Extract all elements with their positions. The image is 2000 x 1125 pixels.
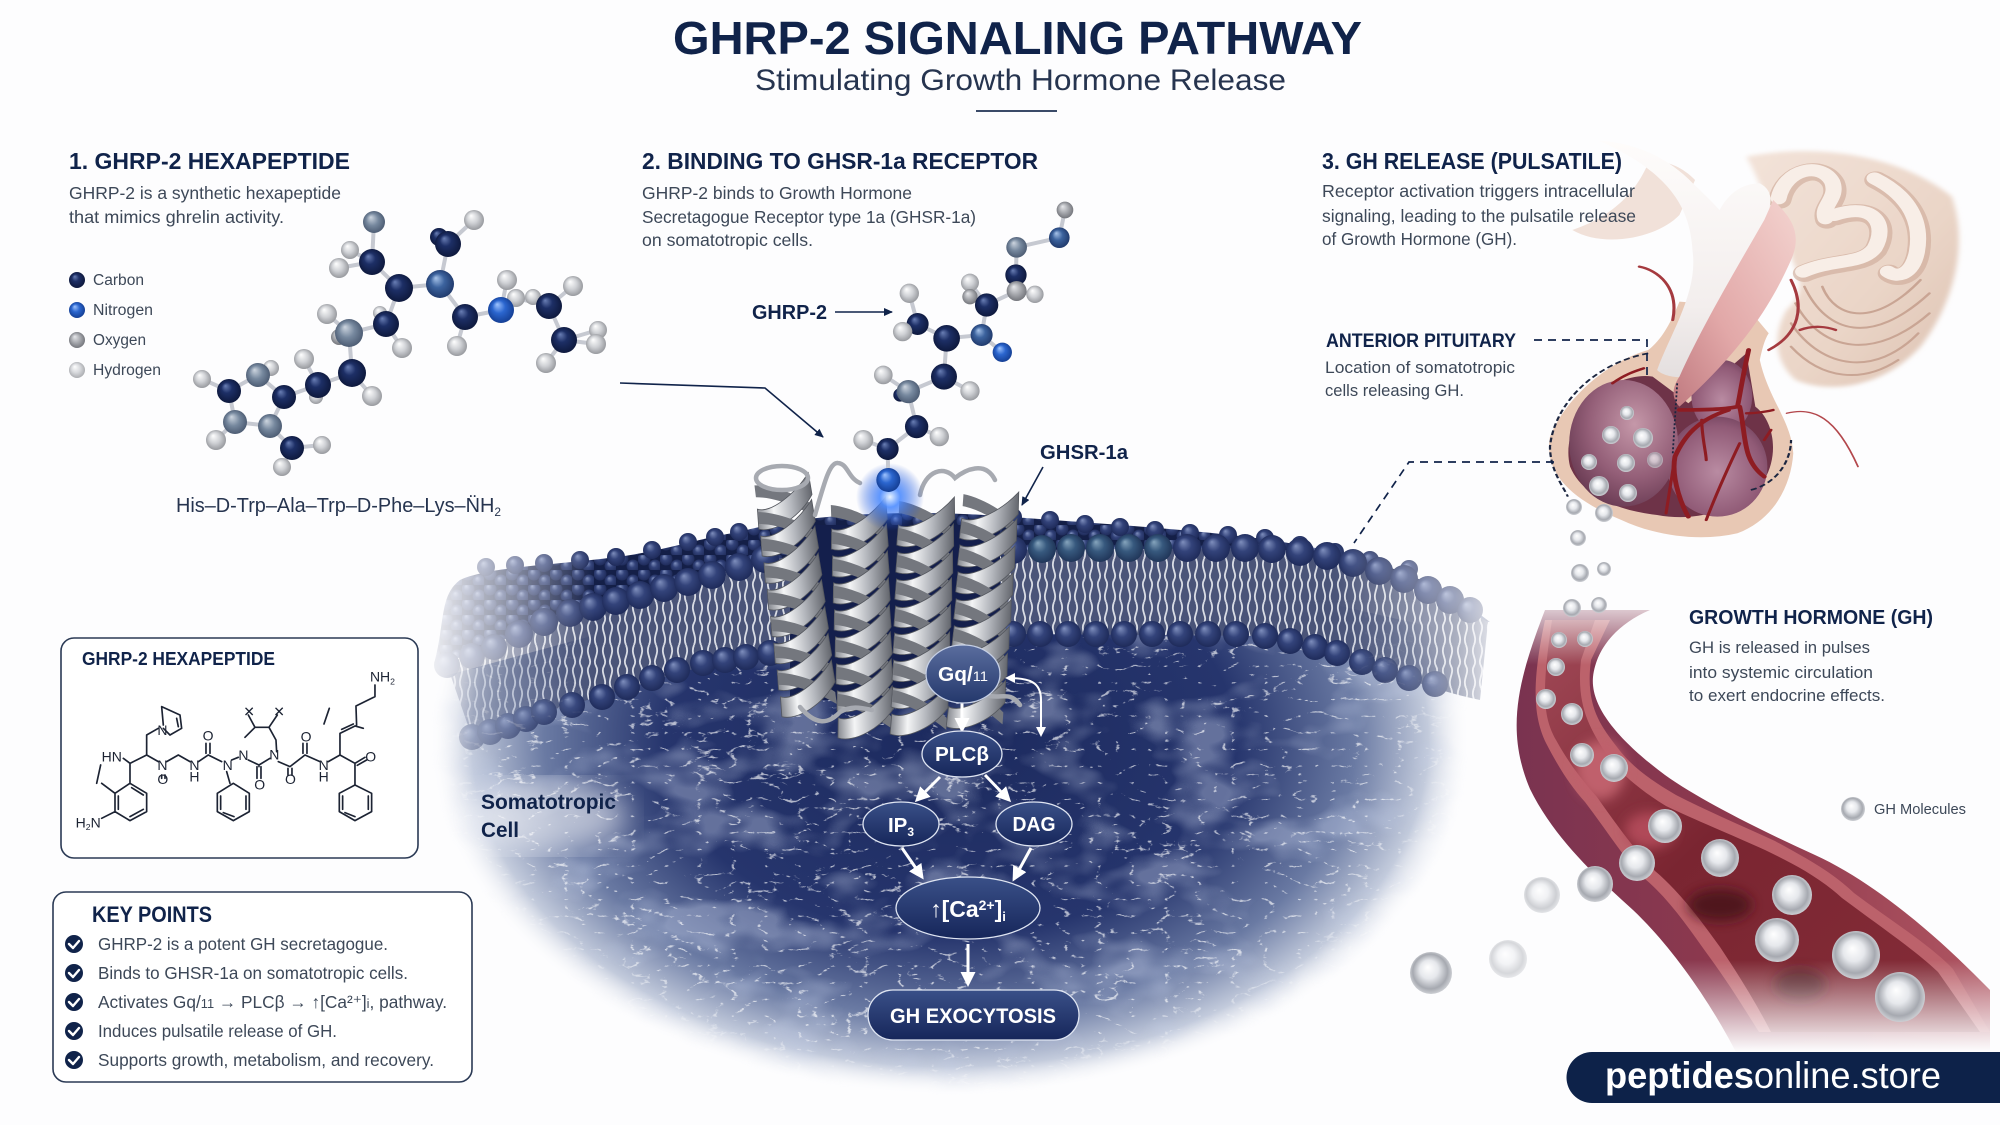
arrow: GHRP-2 label to molecule — [835, 311, 892, 313]
skeletal formula: O — [254, 776, 265, 792]
node: DAG: DAG — [1012, 813, 1056, 836]
node: DAG — [996, 802, 1072, 846]
GH molecules legend — [1841, 797, 1966, 821]
section 2 text: on somatotropic cells. — [642, 230, 813, 250]
atom legend: Nitrogen — [93, 302, 153, 319]
dashed connector: cell to pituitary — [1354, 462, 1554, 543]
section 3 text: 3. GH RELEASE (PULSATILE) — [1322, 148, 1622, 174]
GHSR-1a receptor helices — [753, 463, 1020, 739]
upper lipid heads — [434, 534, 1483, 678]
section 3 text — [1322, 148, 1636, 249]
skeletal formula: NH — [370, 669, 390, 685]
section 2 text: Secretagogue Receptor type 1a (GHSR-1a) — [642, 207, 976, 227]
skeletal formula — [76, 669, 395, 832]
node: calcium: ↑[Ca — [930, 896, 979, 922]
skeletal formula: H — [319, 768, 329, 784]
key points list: Activates Gq/11 → PLCβ → ↑[Ca²⁺]i, pathway. — [98, 992, 447, 1012]
brand bar: peptidesonline.store — [1605, 1055, 1941, 1096]
section 3 text: Receptor activation triggers intracellular — [1322, 181, 1635, 201]
anterior pituitary label: ANTERIOR PITUITARY — [1326, 330, 1516, 352]
label: GHSR-1a: GHSR-1a — [1040, 441, 1129, 464]
pituitary cavity — [1568, 353, 1773, 517]
GH molecules legend: GH Molecules — [1874, 801, 1966, 818]
section 2 text — [642, 148, 1038, 250]
section 1 text: 1. GHRP-2 HEXAPEPTIDE — [69, 148, 350, 174]
secretory beads in pituitary — [1566, 406, 1663, 582]
node: IP3 — [863, 802, 939, 846]
receptor loops — [756, 463, 1020, 721]
pituitary stalk — [1674, 200, 1796, 407]
node: calcium: 2+ — [979, 897, 995, 913]
skeletal formula: H — [189, 768, 199, 784]
title: GHRP-2 SIGNALING PATHWAY — [673, 12, 1362, 64]
node: calcium — [896, 877, 1040, 939]
cell body — [444, 610, 1456, 1088]
node: PLCβ — [922, 731, 1002, 777]
atom legend: Oxygen — [93, 332, 146, 349]
atom legend — [69, 272, 161, 379]
atom legend: Hydrogen — [93, 362, 161, 379]
node: IP3: IP — [888, 814, 907, 837]
binding glow — [856, 463, 924, 531]
skeletal formula: ✕ — [243, 704, 255, 720]
skeletal formula: O — [301, 729, 312, 745]
anterior pituitary label: cells releasing GH. — [1325, 381, 1464, 400]
pathway arrows — [902, 678, 1041, 984]
skeletal formula: N — [157, 757, 167, 773]
node: GH exocytosis — [868, 990, 1079, 1040]
peptide sequence: 2 — [494, 505, 501, 519]
anterior pituitary label — [1325, 330, 1516, 400]
bound GHRP-2 molecule — [853, 202, 1073, 492]
check icons — [65, 935, 83, 1069]
key points panel — [53, 892, 472, 1082]
node: calcium: ] — [995, 896, 1002, 922]
skeletal formula: O — [365, 749, 376, 765]
key points heading: KEY POINTS — [92, 902, 212, 927]
node: Gq/11 — [926, 645, 1000, 703]
receptor core — [790, 525, 1000, 700]
node: PLCβ: PLCβ — [935, 743, 989, 766]
key points list: Binds to GHSR-1a on somatotropic cells. — [98, 963, 408, 983]
white matter tract — [1599, 141, 1770, 377]
section 1 text: that mimics ghrelin activity. — [69, 207, 284, 227]
subtitle: Stimulating Growth Hormone Release — [755, 64, 1286, 97]
label: somatotropic cell — [468, 782, 628, 850]
node: IP3: 3 — [907, 825, 914, 839]
skeletal formula: N — [238, 747, 248, 763]
skeletal formula: O — [285, 771, 296, 787]
skeletal formula: N — [157, 722, 167, 738]
capsule — [1549, 302, 1793, 537]
skeletal formula: N — [319, 757, 329, 773]
arteries — [1612, 267, 1858, 520]
section 1 text: GHRP-2 is a synthetic hexapeptide — [69, 183, 341, 203]
peptide sequence: His–D-Trp–Ala–Trp–D-Phe–Lys–N̈H — [176, 495, 496, 517]
atom legend: Carbon — [93, 272, 144, 289]
skeletal formula: N — [269, 746, 279, 762]
section 3 text: signaling, leading to the pulsatile release — [1322, 206, 1636, 226]
3D GHRP-2 molecule — [193, 210, 607, 476]
skeletal formula: HN — [102, 749, 122, 765]
key points list: Supports growth, metabolism, and recovery. — [98, 1050, 434, 1070]
section 1 text — [69, 148, 350, 227]
blood vessel — [1500, 590, 2000, 1060]
skeletal formula: 2 — [390, 676, 395, 686]
growth hormone text: to exert endocrine effects. — [1689, 686, 1885, 705]
node: calcium: i — [1002, 909, 1006, 924]
growth hormone text — [1689, 606, 1933, 705]
key points list: Induces pulsatile release of GH. — [98, 1021, 337, 1041]
label: somatotropic cell: Somatotropic — [481, 791, 616, 814]
brain and pituitary illustration — [1549, 141, 1959, 537]
arrow: GHSR-1a label to receptor — [1022, 467, 1043, 505]
skeletal formula: H — [76, 814, 86, 830]
growth hormone text: GH is released in pulses — [1689, 638, 1870, 657]
label: somatotropic cell: Cell — [481, 819, 519, 842]
skeletal formula: O — [203, 728, 214, 744]
membrane bilayer — [434, 508, 1490, 750]
key points list — [98, 934, 447, 1070]
arrow: molecule to receptor — [620, 383, 823, 437]
dashed leader: anterior pituitary — [1534, 340, 1647, 378]
node: GH exocytosis: GH EXOCYTOSIS — [890, 1005, 1056, 1028]
growth hormone text: GROWTH HORMONE (GH) — [1689, 606, 1933, 629]
pituitary dashed outline — [1550, 353, 1791, 497]
section 3 text: of Growth Hormone (GH). — [1322, 229, 1517, 249]
pituitary lobes — [1569, 360, 1767, 517]
skeletal formula: O — [157, 771, 168, 787]
skeletal formula: 2 — [86, 822, 91, 832]
section 2 text: 2. BINDING TO GHSR-1a RECEPTOR — [642, 148, 1038, 174]
node: Gq/11: Gq/11 — [938, 664, 988, 686]
skeletal formula: N — [189, 757, 199, 773]
structure panel heading: GHRP-2 HEXAPEPTIDE — [82, 648, 275, 669]
brand bar — [1566, 1052, 2000, 1103]
back rim lipid heads — [477, 508, 1418, 578]
lumen shading — [1575, 740, 1826, 1001]
growth hormone text: into systemic circulation — [1689, 663, 1873, 682]
label: GHRP-2: GHRP-2 — [752, 301, 827, 324]
lower lipid heads — [459, 621, 1448, 750]
structure panel — [61, 638, 418, 858]
section 2 text: GHRP-2 binds to Growth Hormone — [642, 183, 912, 203]
anterior pituitary label: Location of somatotropic — [1325, 358, 1516, 377]
GH molecules — [1410, 597, 1925, 1022]
skeletal formula: N — [223, 757, 233, 773]
brain — [1572, 151, 1959, 387]
skeletal formula: N — [91, 814, 101, 830]
key points list: GHRP-2 is a potent GH secretagogue. — [98, 934, 388, 954]
skeletal formula: ✕ — [273, 704, 285, 720]
